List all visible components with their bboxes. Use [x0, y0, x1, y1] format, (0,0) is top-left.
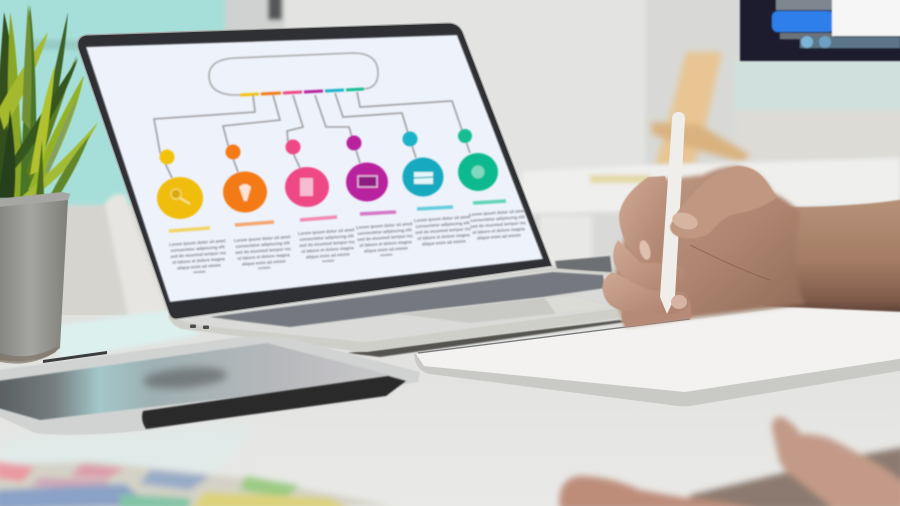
thumb	[559, 476, 760, 506]
tablet surface	[0, 343, 402, 420]
white side table	[522, 158, 900, 310]
step 6	[458, 129, 498, 191]
lorem text blocks: ut labore et dolore magna	[472, 226, 525, 235]
lorem text blocks: ut labore et dolore magna	[359, 239, 412, 248]
metal pot	[0, 192, 70, 362]
lorem text blocks: aliqua enim ad minim	[242, 258, 286, 266]
lorem text blocks: sed do eiusmod tempor inc	[299, 239, 356, 248]
lorem text blocks: Lorem ipsum dolor sit amet	[169, 238, 226, 247]
thumb	[670, 166, 777, 238]
lorem text blocks: ut labore et dolore magna	[172, 256, 226, 265]
laptop screen	[86, 35, 543, 302]
step 2	[223, 144, 267, 212]
middle finger	[613, 240, 687, 293]
lorem text blocks: veniam	[193, 270, 206, 274]
lorem text blocks: ut labore et dolore magna	[301, 245, 354, 254]
lorem text blocks: ut labore et dolore magna	[237, 252, 290, 261]
step 5	[402, 132, 444, 196]
white desk surface	[0, 310, 900, 506]
index finger	[619, 176, 670, 263]
lorem text blocks: Lorem ipsum dolor sit amet	[234, 234, 291, 243]
laptop lid bezel	[78, 23, 552, 319]
lower finger nail	[671, 295, 687, 309]
lorem text blocks: sed do eiusmod tempor inc	[170, 250, 227, 259]
lorem text blocks: Lorem ipsum dolor sit amet	[356, 221, 413, 230]
lorem text blocks: aliqua enim ad minim	[177, 262, 221, 270]
blurred foreground hand	[559, 417, 900, 506]
lorem text blocks: aliqua enim ad minim	[422, 238, 466, 246]
forefinger	[772, 417, 900, 506]
lorem text blocks: veniam	[322, 259, 335, 263]
forearm	[765, 199, 900, 312]
lorem text blocks: Lorem ipsum dolor sit amet	[414, 214, 471, 223]
lorem text blocks: sed do eiusmod tempor inc	[415, 226, 472, 235]
lorem text blocks: aliqua enim ad minim	[477, 232, 521, 240]
dark pad	[690, 447, 900, 506]
label bars	[169, 201, 506, 231]
lorem text blocks: Lorem ipsum dolor sit amet	[469, 208, 526, 217]
lorem text blocks: sed do eiusmod tempor inc	[357, 233, 414, 242]
writing hand with white pen	[602, 112, 900, 327]
laptop	[78, 23, 625, 357]
lorem text blocks: sed do eiusmod tempor inc	[235, 246, 292, 255]
background monitor	[740, 0, 900, 61]
index fingertip nail	[638, 239, 652, 261]
connector lines	[154, 92, 470, 178]
plant in metal pot	[0, 4, 98, 364]
lorem text blocks	[169, 208, 528, 276]
lorem text blocks: aliqua enim ad minim	[306, 251, 350, 259]
step 3	[285, 140, 329, 207]
lorem text blocks: consectetur adipiscing elit	[470, 214, 525, 223]
white tablet	[414, 306, 900, 406]
drawing tablet with black stylus	[0, 337, 420, 435]
spiral notebook behind laptop	[555, 256, 612, 273]
coloured segments	[240, 89, 364, 95]
colour swatch fan	[0, 462, 395, 506]
trackpad	[398, 295, 617, 323]
lorem text blocks: consectetur adipiscing elit	[235, 240, 290, 249]
palm creases	[690, 200, 770, 280]
black stylus	[142, 376, 406, 429]
lorem text blocks: veniam	[380, 253, 393, 257]
lorem text blocks: consectetur adipiscing elit	[299, 233, 354, 242]
little finger	[622, 300, 692, 327]
lorem text blocks: consectetur adipiscing elit	[357, 227, 412, 236]
screen infographic	[154, 53, 528, 276]
blurred background room	[0, 0, 900, 330]
lorem text blocks: aliqua enim ad minim	[364, 245, 408, 253]
lorem text blocks: veniam	[258, 266, 271, 270]
palm	[612, 166, 805, 327]
top rounded pill	[209, 53, 378, 95]
step 1	[157, 150, 203, 219]
white pen	[660, 112, 685, 314]
thumb nail	[670, 210, 700, 232]
laptop base	[168, 268, 625, 357]
lorem text blocks: sed do eiusmod tempor inc	[470, 220, 527, 229]
lorem text blocks: Lorem ipsum dolor sit amet	[298, 227, 355, 236]
lorem text blocks: consectetur adipiscing elit	[170, 244, 225, 253]
wooden stand	[651, 52, 750, 166]
ring finger	[602, 272, 688, 314]
keyboard	[210, 272, 605, 327]
lorem text blocks: consectetur adipiscing elit	[415, 220, 470, 229]
green leaves	[0, 4, 98, 198]
step 4	[346, 136, 388, 202]
lorem text blocks: ut labore et dolore magna	[417, 232, 470, 241]
